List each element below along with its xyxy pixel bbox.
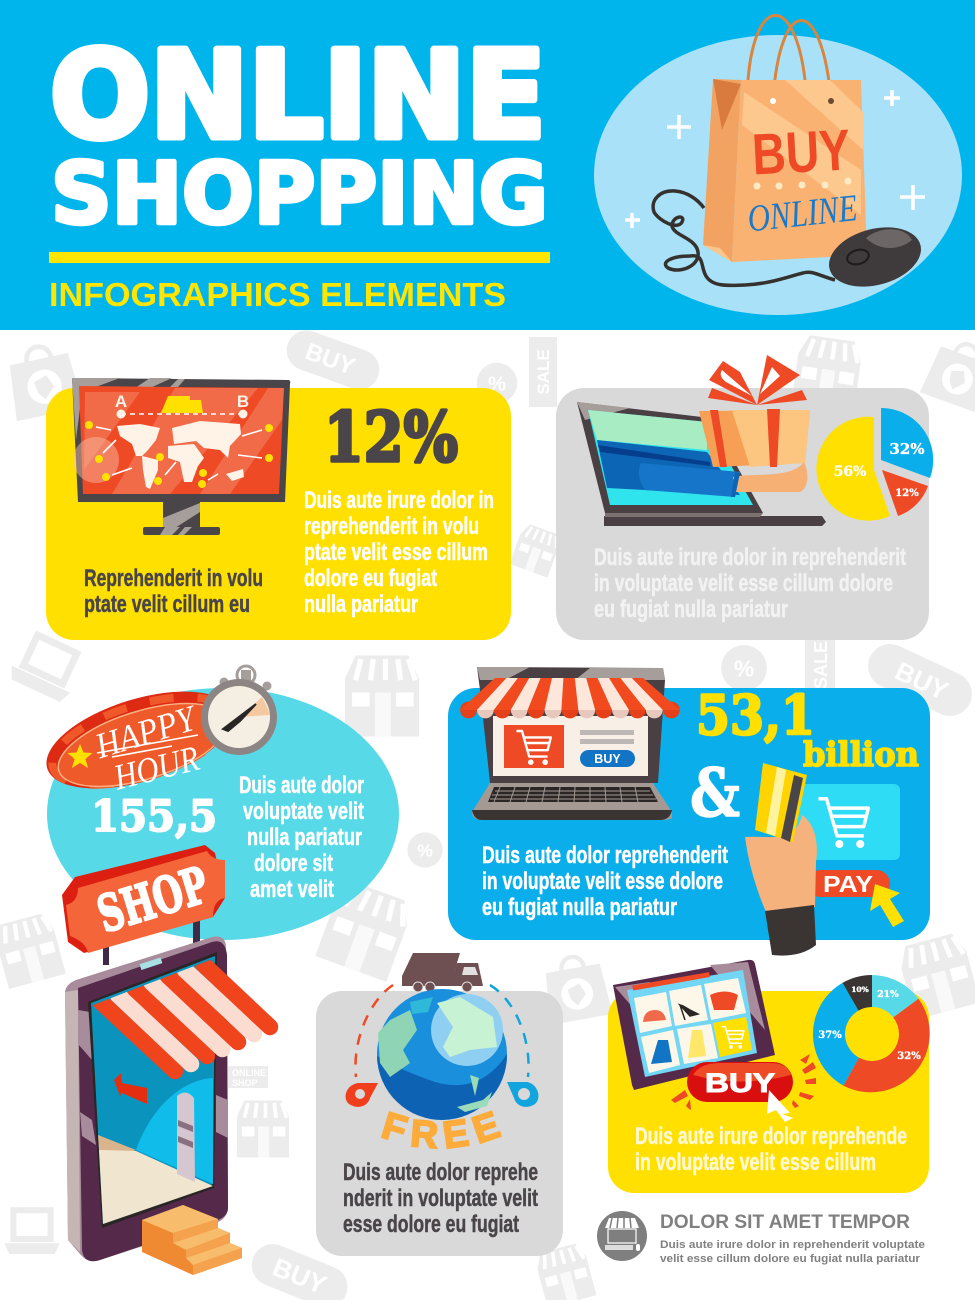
header band [0,0,975,330]
footer note [597,1211,925,1265]
title underline [49,252,550,263]
text block [343,1159,538,1238]
icon: shop badge [597,1211,647,1261]
background pattern: SALE [811,641,831,689]
icon: hand with card [745,763,817,956]
text block: nulla pariatur [304,591,418,618]
footer text: velit esse cillum dolore eu fugiat nulla pariatur [660,1253,921,1265]
icon: steps [142,1205,242,1275]
text block: voluptate velit [243,798,364,825]
text block: dolore eu fugiat [304,565,437,592]
pie chart: 32% [889,440,925,458]
icon: truck [402,953,483,992]
icon: shop sign [62,845,225,953]
background pattern: BUY [891,656,953,706]
icon: yellow cursor [870,884,904,927]
icon: shop sign: SHOP [91,855,215,944]
panel: gift delivery stat [556,355,933,640]
subtitle: INFOGRAPHICS ELEMENTS [49,276,506,313]
icon: monitor with world map: B [237,392,249,411]
text block: eu fugiat nulla pariatur [482,894,677,921]
stat: 12%: 12% [324,398,458,478]
donut chart: 32% [897,1051,921,1062]
background pattern: BUY [269,1252,331,1300]
text block: reprehenderit in volu [304,513,479,540]
footer text: Duis aute irure dolor in reprehenderit voluptate [660,1239,925,1251]
footer text [660,1239,925,1265]
button: buy [671,1054,816,1122]
donut chart: 10% [851,985,869,994]
text block: eu fugiat nulla pariatur [594,596,788,623]
icon: monitor with world map [72,378,290,535]
icon: shopping bag and mouse: BUY [750,117,852,187]
caption: ptate velit cillum eu [84,591,250,618]
icon: shopping bag and mouse [594,16,962,315]
stat: 53,1: 53,1 [696,683,815,747]
arrow: red route [355,985,393,1077]
donut chart: 37% [818,1030,842,1041]
text block: Duis aute dolor [239,772,364,799]
text block: dolore sit [254,850,333,877]
background pattern: BUY [302,338,358,381]
panel: tablet shop [608,960,930,1193]
donut chart [813,975,930,1092]
icon: globe [377,989,507,1120]
icon: shopping bag and mouse: ONLINE [746,187,859,240]
panel: happy hour oval [35,666,399,940]
stat: billion: billion [803,735,919,775]
icon: cart tile [795,784,900,860]
background pattern: ONLINE [232,1068,266,1078]
text block: nulla pariatur [247,824,362,851]
text block: esse dolore eu fugiat [343,1211,519,1238]
arrow: blue route [490,985,529,1077]
panel: online store stat [448,667,930,956]
pie chart [816,408,933,521]
button: pay [807,870,890,897]
text block: Duis aute dolor reprehenderit [482,842,728,869]
text block: in voluptate velit esse dolore [482,868,723,895]
text block: Duis aute dolor reprehe [343,1159,538,1186]
background pattern: SHOP [232,1078,258,1088]
icon: laptop with gift [577,355,826,526]
text block: nderit in voluptate velit [343,1185,538,1212]
icon: tablet [613,960,775,1090]
pie chart: 12% [895,488,919,499]
background pattern [0,325,975,1300]
text block [635,1123,907,1176]
background pattern: SALE [534,349,553,395]
ampersand: & [690,754,740,832]
text block [304,487,494,618]
text block [594,544,906,623]
pie chart: 56% [834,464,866,480]
icon: monitor with world map: A [115,392,127,411]
footer heading: DOLOR SIT AMET TEMPOR [660,1212,910,1233]
caption: Reprehenderit in volu [84,565,263,592]
text block [482,842,728,921]
text block [239,772,364,903]
icon: phone shop [65,920,270,1275]
title: ONLINE [50,27,546,166]
icon: laptop storefront [460,667,680,820]
text block: amet velit [250,876,334,903]
button: pay: PAY [823,871,873,897]
icon: red pin [346,1083,378,1107]
icon: blue pin [507,1082,538,1107]
icon: laptop storefront: BUY [594,752,621,766]
icon: happy hour sign: HOUR [109,738,203,798]
icon: happy hour sign [35,672,245,808]
panel: free delivery [316,953,563,1256]
title [50,27,548,244]
title: SHOPPING [51,145,548,244]
button: buy: BUY [705,1068,775,1098]
donut chart: 21% [877,989,899,1000]
caption [84,565,263,618]
label: free: FREE [380,1110,502,1150]
text block: in voluptate velit esse cillum [635,1149,876,1176]
stat: 155,5: 155,5 [91,792,217,842]
icon: happy hour sign: HAPPY [90,697,203,766]
panel: monitor delivery stat [46,378,511,640]
text block: ptate velit esse cillum [304,539,488,566]
icon: stopwatch [201,666,277,755]
text block: Duis aute irure dolor in [304,487,494,514]
